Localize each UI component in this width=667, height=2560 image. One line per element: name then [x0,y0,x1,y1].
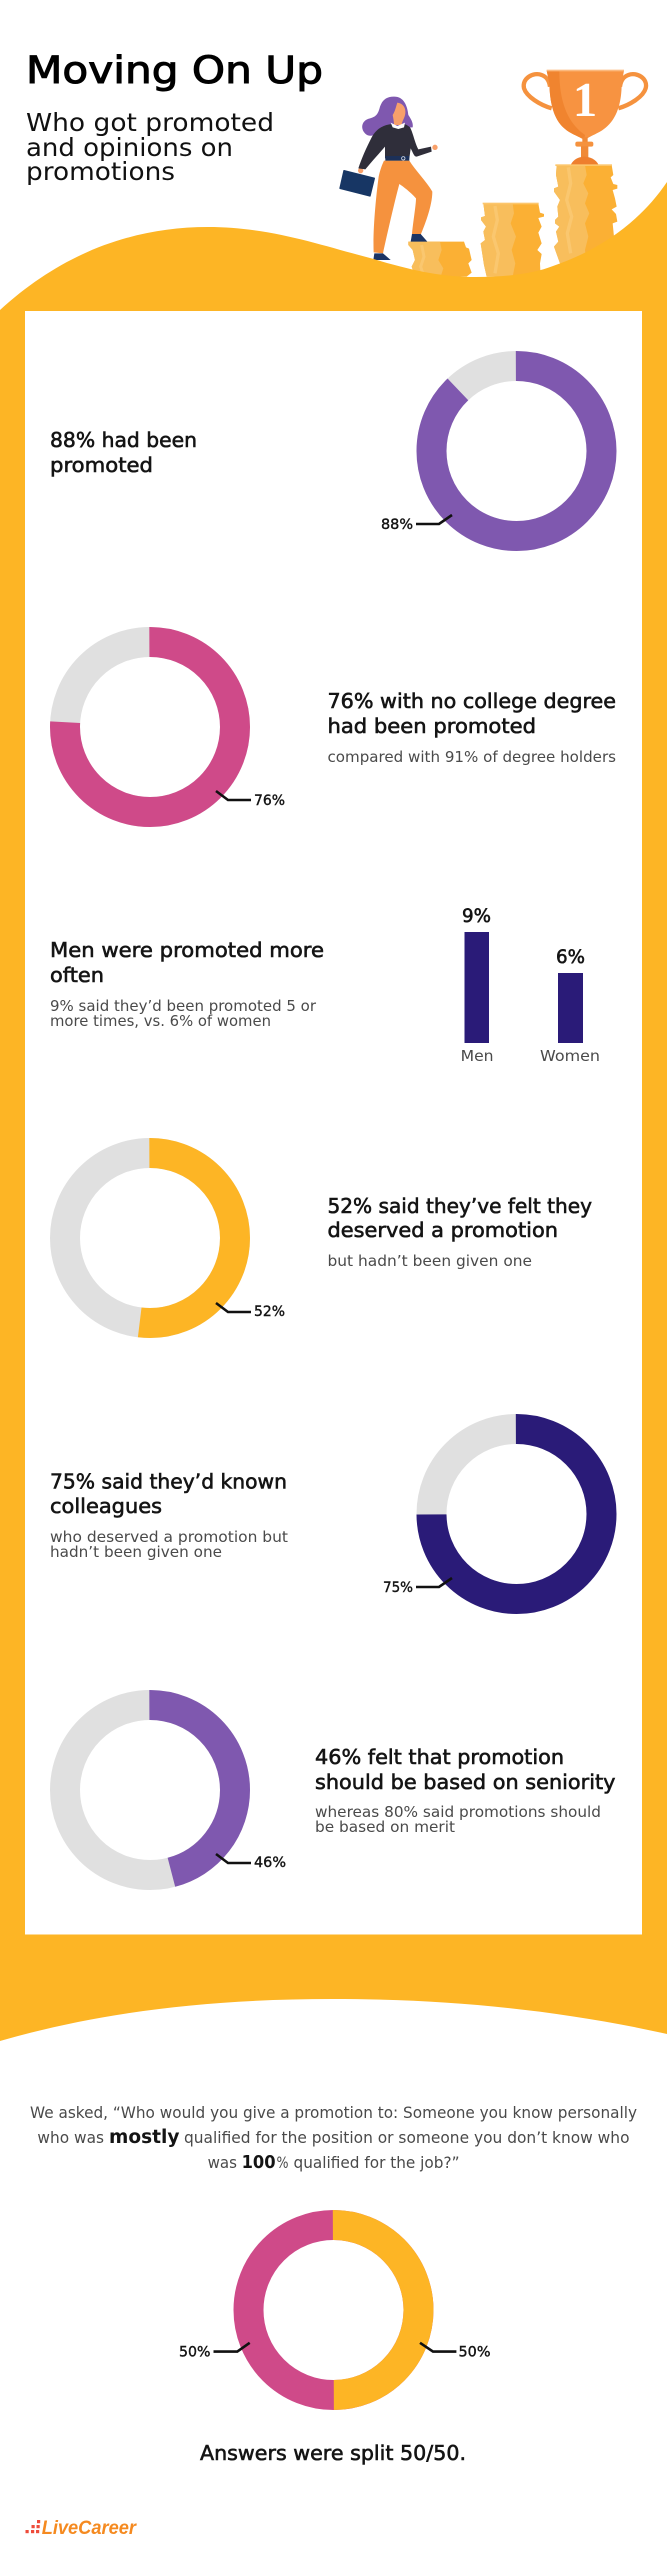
stat text: men were promoted more often: Men were promoted more [50,938,324,962]
donut chart: 76% [65,642,285,812]
donut chart: 46% [65,1705,286,1875]
conclusion text: Answers were split 50/50. [200,2441,466,2465]
stat heading: 88% had been promoted [50,428,197,477]
question text: who was [37,2128,104,2147]
stat text: 75% known colleagues: 75% said they’d known [50,1470,287,1494]
question text [30,2103,637,2173]
subtitle [26,108,274,186]
bar chart: men vs women [461,905,600,1065]
stat heading: 88% had been promoted: 88% had been [50,428,197,452]
bar chart: men vs women: Men [461,1047,494,1065]
stat text: 46% seniority: whereas 80% said promotions should [315,1803,601,1821]
question text: We asked, “Who would you give a promotion to: Someone you know personally [30,2103,637,2122]
donut chart: 88% [381,366,602,536]
title: Moving On Up [26,49,323,92]
question text: 100 [242,2152,276,2173]
yellow wavy background [0,182,667,2041]
icon: coin stack large [554,164,617,263]
stat text: 75% known colleagues: hadn’t been given one [50,1543,222,1561]
stat text: 76% with no college degree: had been promoted [328,714,536,738]
icon: woman with briefcase [340,97,438,260]
stat text: 76% with no college degree [328,689,616,766]
donut chart: 52% [65,1153,285,1323]
donut chart: 50/50 split: 50% [458,2345,490,2361]
donut chart: 50/50 split [179,2225,490,2395]
stat text: 46% seniority: 46% felt that promotion [315,1745,564,1769]
stat text: 52% deserved a promotion [328,1194,592,1270]
header illustration: woman climbing coin stacks to trophy [340,70,646,277]
stat text: 75% known colleagues [50,1470,288,1561]
donut chart: 75% [383,1429,602,1599]
stat text: 76% with no college degree: 76% with no college degree [328,689,616,713]
stat text: 76% with no college degree: compared with 91% of degree holders [328,748,616,766]
stat text: 75% known colleagues: who deserved a promotion but [50,1528,288,1546]
subtitle: promotions [26,157,175,186]
stat text: 46% seniority: should be based on seniority [315,1770,616,1794]
subtitle: and opinions on [26,133,233,162]
logo: LiveCareer: LiveCareer [42,2518,138,2539]
stat text: men were promoted more often [50,938,324,1030]
bar chart: men vs women: Women [540,1047,600,1065]
question text: qualified for the job?” [294,2153,460,2172]
stat text: 75% known colleagues: colleagues [50,1494,162,1518]
stat text: 52% deserved a promotion: but hadn’t been given one [328,1252,532,1270]
question text: qualified for the position or someone you don’t know who [184,2128,630,2147]
stat text: men were promoted more often: more times, vs. 6% of women [50,1012,271,1030]
donut chart: 75%: 75% [383,1580,413,1596]
question text: % [276,2153,288,2172]
stat text: men were promoted more often: 9% said they’d been promoted 5 or [50,997,317,1015]
stat text: 46% seniority: be based on merit [315,1818,455,1836]
question text: was [208,2153,237,2172]
donut chart: 50/50 split: 50% [179,2345,210,2361]
icon: trophy [524,70,646,165]
stat text: 46% seniority [315,1745,616,1836]
question text: mostly [109,2127,180,2148]
stat heading: 88% had been promoted: promoted [50,453,153,477]
donut chart: 76%: 76% [254,793,285,809]
donut chart: 88%: 88% [381,517,413,533]
icon: coin stack medium [481,203,544,277]
stat text: 52% deserved a promotion: 52% said they’ve felt they [328,1194,592,1218]
donut chart: 46%: 46% [254,1855,286,1871]
icon: trophy: 1 [573,73,597,127]
stat text: men were promoted more often: often [50,963,104,987]
bar chart: men vs women: 9% [462,905,491,927]
stat text: 52% deserved a promotion: deserved a promotion [328,1218,558,1242]
panel: white statistics panel [25,311,642,1934]
donut chart: 52%: 52% [254,1304,285,1320]
subtitle: Who got promoted [26,108,274,137]
icon: coin stack small [408,242,472,277]
bar chart: men vs women: 6% [556,946,585,968]
